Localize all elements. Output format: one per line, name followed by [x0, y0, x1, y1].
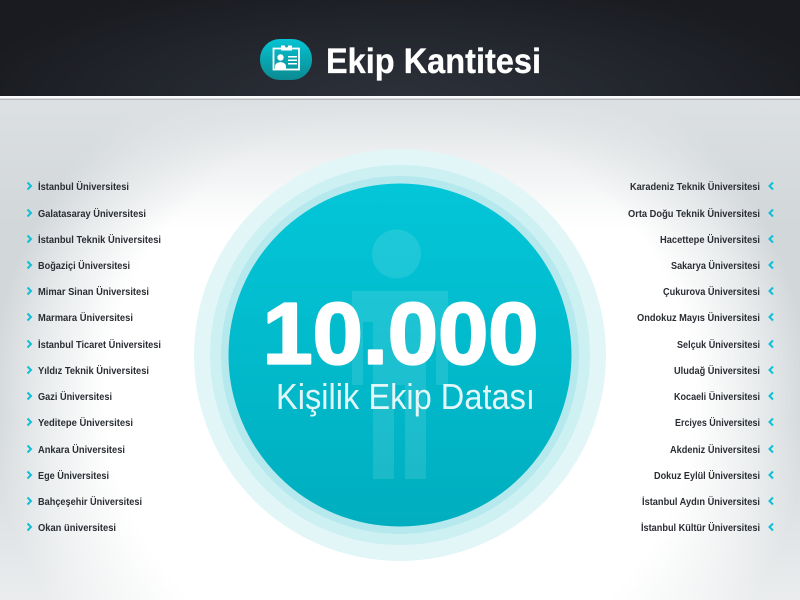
list: left universities: Okan üniversitesi — [38, 522, 116, 534]
list: right universities: Uludağ Üniversitesi — [674, 364, 760, 377]
list: right universities: Çukurova Üniversitesi — [663, 285, 760, 298]
list: left universities: İstanbul Ticaret Üniversitesi — [38, 338, 161, 351]
list: left universities: Yıldız Teknik Üniversitesi — [38, 364, 149, 377]
list: left universities: Bahçeşehir Üniversitesi — [38, 495, 142, 508]
list: right universities: Selçuk Üniversitesi — [677, 338, 760, 351]
list: right universities: Dokuz Eylül Üniversitesi — [654, 469, 760, 482]
icon: person silhouette — [352, 230, 448, 479]
list: right universities: Erciyes Üniversitesi — [675, 416, 760, 429]
list: left universities: İstanbul Üniversitesi — [38, 180, 129, 193]
list: left universities: Marmara Üniversitesi — [38, 311, 133, 324]
list: right universities: Karadeniz Teknik Üniversitesi — [630, 180, 760, 193]
icon: id badge — [260, 39, 312, 80]
concentric circle badge — [194, 149, 606, 561]
list: right universities: Orta Doğu Teknik Üniversitesi — [628, 207, 760, 220]
list: right universities: Sakarya Üniversitesi — [671, 259, 760, 272]
icons: left chevrons — [28, 182, 31, 530]
list: right universities — [628, 180, 760, 534]
list: left universities — [38, 180, 161, 534]
list: left universities: Galatasaray Üniversitesi — [38, 207, 146, 220]
list: left universities: Gazi Üniversitesi — [38, 390, 112, 403]
list: right universities: Akdeniz Üniversitesi — [670, 443, 760, 456]
list: right universities: Kocaeli Üniversitesi — [674, 390, 760, 403]
list: left universities: Boğaziçi Üniversitesi — [38, 259, 130, 272]
list: left universities: Yeditepe Üniversitesi — [38, 416, 133, 429]
title: Ekip Kantitesi — [326, 42, 541, 81]
icons: right chevrons — [770, 182, 773, 530]
subtitle: Kişilik Ekip Datası — [276, 376, 535, 417]
header bar — [0, 0, 800, 100]
list: right universities: Ondokuz Mayıs Üniversitesi — [637, 311, 760, 324]
list: right universities: Hacettepe Üniversitesi — [660, 233, 760, 246]
list: left universities: Mimar Sinan Üniversitesi — [38, 285, 149, 298]
list: left universities: İstanbul Teknik Üniversitesi — [38, 233, 161, 246]
list: left universities: Ankara Üniversitesi — [38, 443, 125, 456]
list: right universities: İstanbul Aydın Üniversitesi — [642, 495, 760, 508]
list: left universities: Ege Üniversitesi — [38, 469, 109, 482]
list: right universities: İstanbul Kültür Üniversitesi — [641, 521, 760, 534]
big number: 10.000 — [262, 286, 538, 382]
